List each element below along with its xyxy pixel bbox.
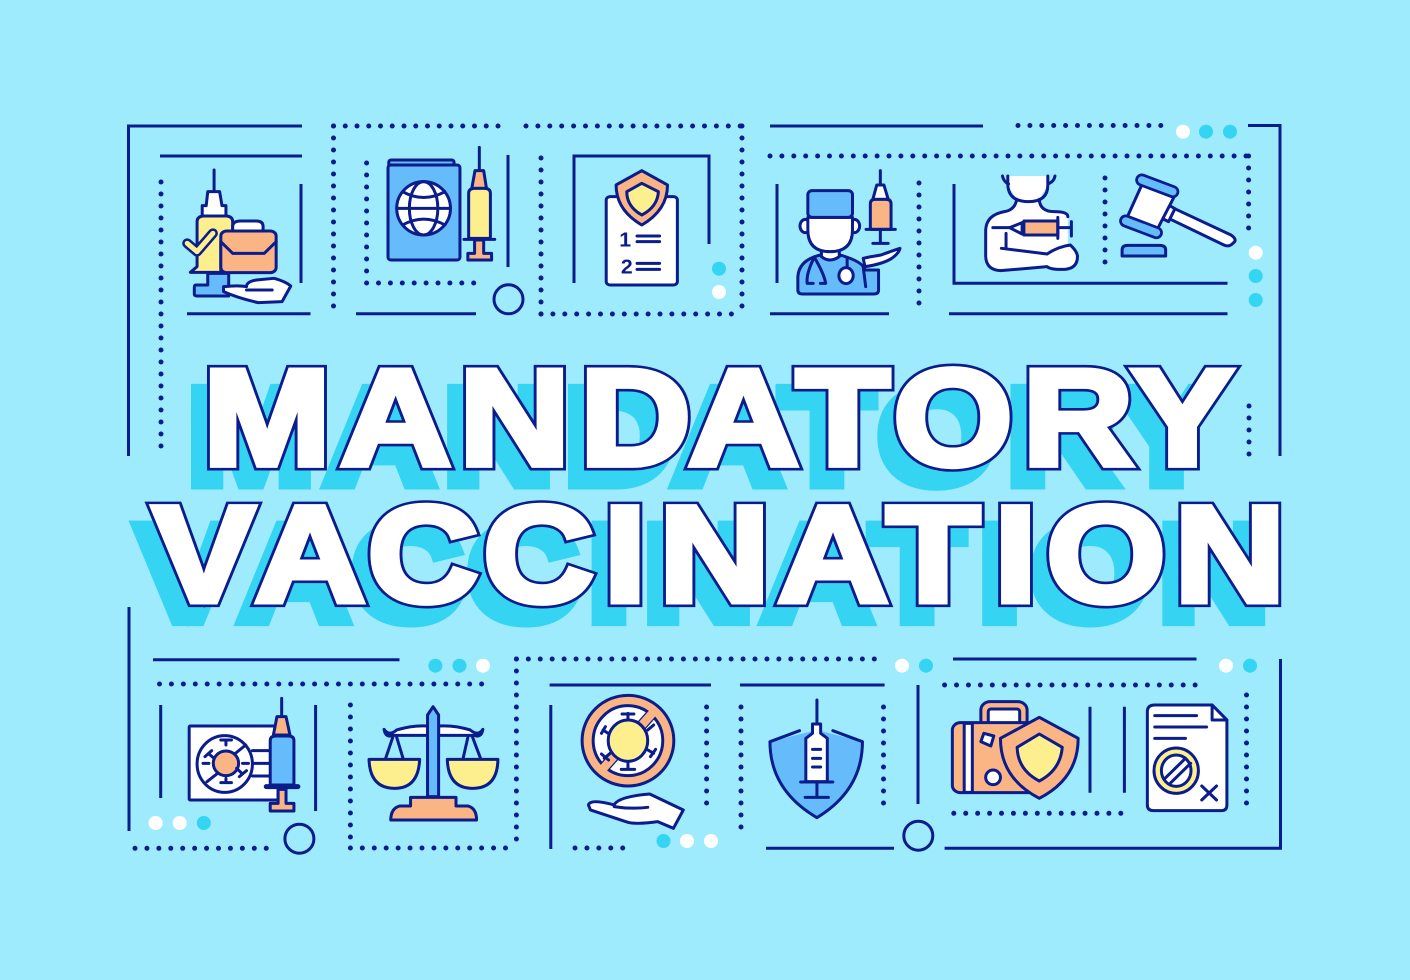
- title: MANDATORY: [203, 340, 1234, 494]
- title: VACCINATION: [153, 477, 1285, 631]
- title shadow: [137, 359, 1269, 650]
- icon: arm receiving injection: [986, 176, 1077, 271]
- title shadow: VACCINATION: [137, 496, 1269, 650]
- icon: doctor with syringe: [798, 171, 900, 294]
- bottom frame lines and dotted panels: [129, 607, 1280, 853]
- icon: gavel: [1122, 180, 1235, 256]
- icon: document with shield and numbered list: 1: [619, 228, 631, 251]
- title: [153, 340, 1285, 631]
- title: MANDATORY: [203, 340, 1234, 494]
- top frame lines and dotted panels: [128, 125, 1280, 456]
- icon: document with shield and numbered list: 2: [621, 254, 633, 278]
- icon: balance scales: [369, 707, 498, 820]
- icon: document with prohibition stamp: [1147, 705, 1227, 811]
- title: VACCINATION: [153, 477, 1285, 631]
- icon: syringe, briefcase and hand: [187, 170, 291, 303]
- icon: document with shield and numbered list: [606, 171, 677, 285]
- icon: crossed-out virus above hand: [582, 695, 683, 828]
- icon: suitcase with shield: [952, 702, 1078, 798]
- icon: shield with syringe: [770, 700, 862, 818]
- title shadow: MANDATORY: [187, 359, 1218, 513]
- icon: passport and syringe: [388, 147, 495, 260]
- icon: vaccine certificate with virus and syringe: [189, 698, 298, 811]
